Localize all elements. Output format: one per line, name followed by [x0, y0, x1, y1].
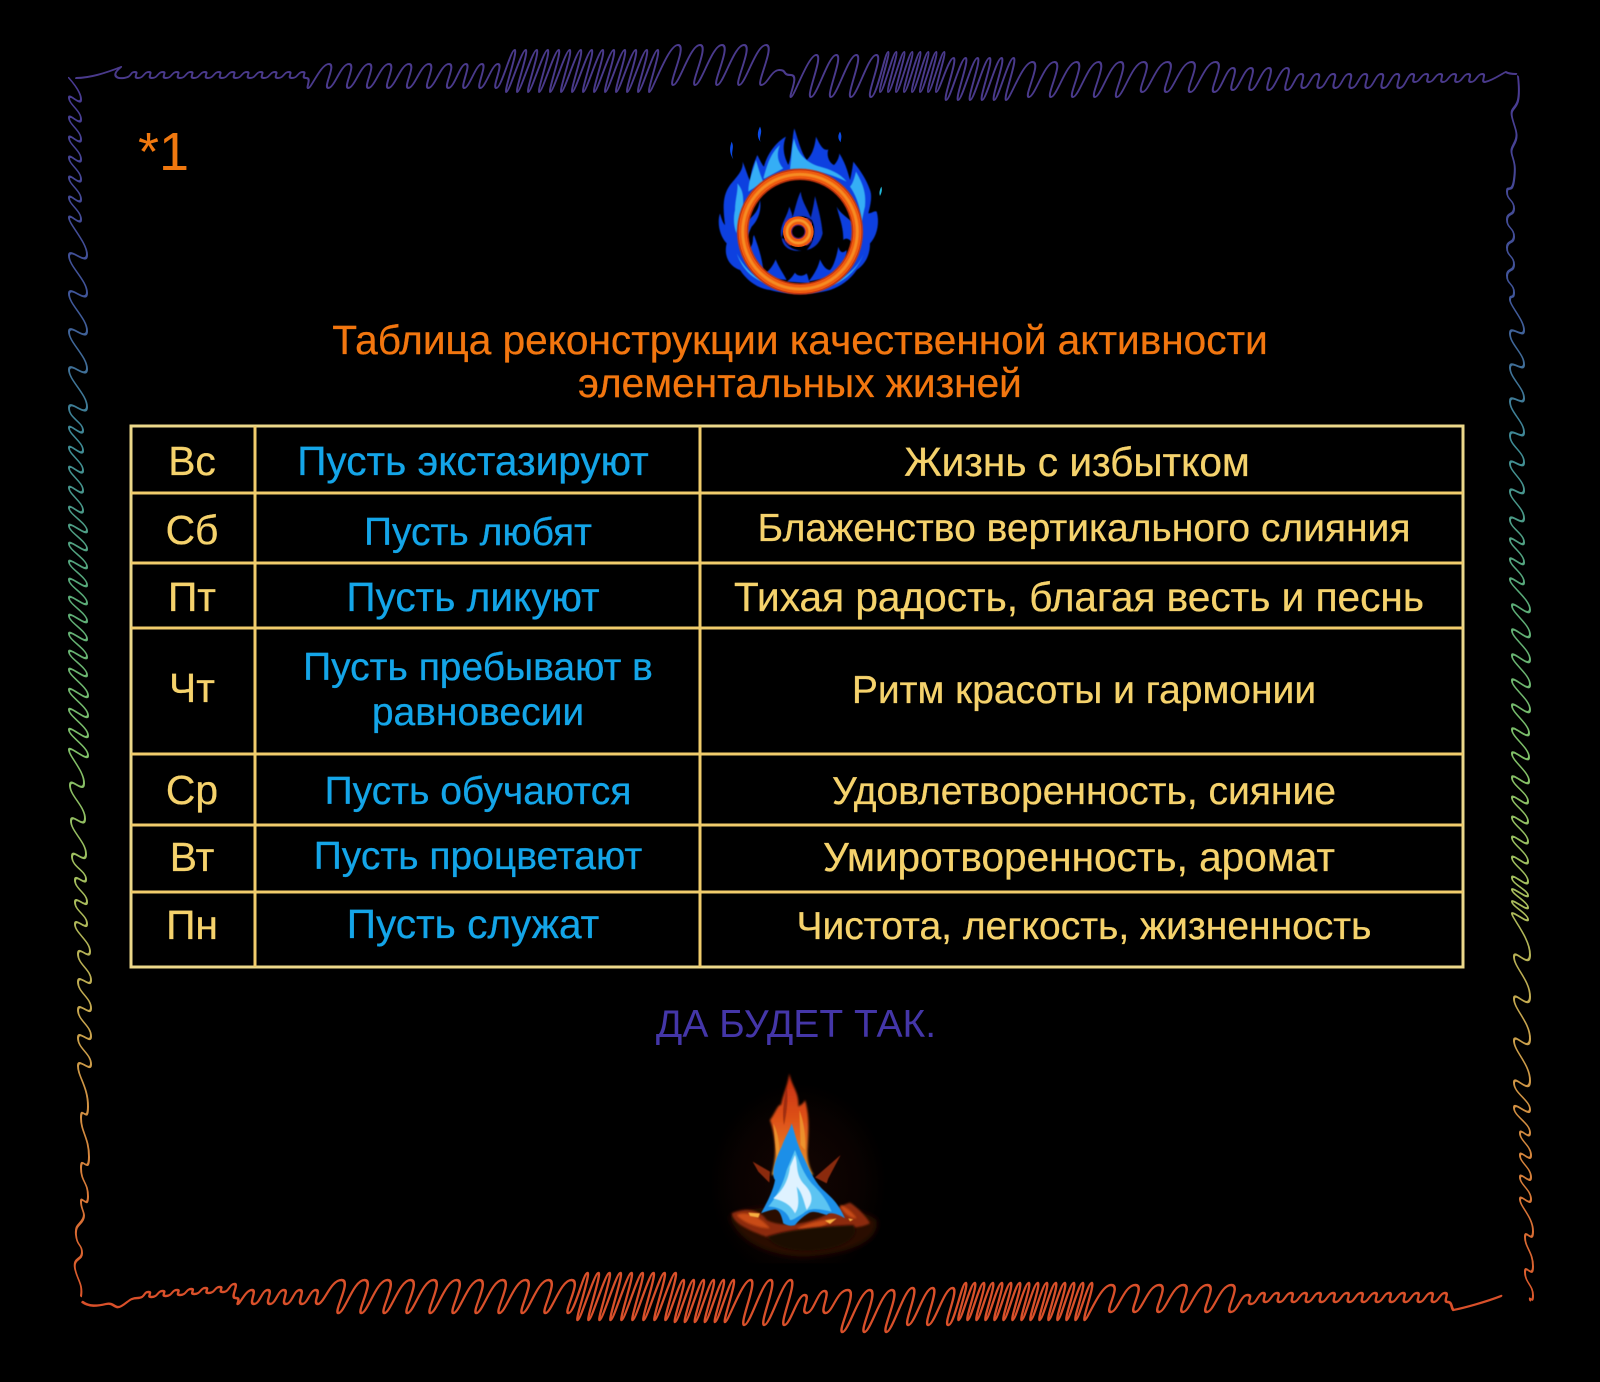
table: blessings column: Пусть процветают — [314, 835, 642, 878]
icon: campfire with blue flame — [710, 1063, 887, 1263]
table: qualities column: Жизнь с избытком — [904, 439, 1250, 485]
inner ring — [787, 220, 810, 243]
table: blessings column: Пусть экстазируют — [297, 438, 649, 484]
table grid — [131, 426, 1463, 967]
decorative frame: right wavy line — [1507, 70, 1533, 1302]
table: blessings column: Пусть ликуют — [346, 574, 600, 620]
outer flames — [719, 128, 878, 294]
table: days column: Вт — [170, 834, 214, 880]
table: blessings column: Пусть пребывают в — [303, 646, 653, 689]
table: qualities column: Чистота, легкость, жизненность — [797, 905, 1371, 948]
title — [332, 317, 1268, 406]
decorative frame: top wavy line — [70, 45, 1524, 100]
light flame streaks — [734, 138, 865, 285]
table: qualities column: Умиротворенность, аромат — [823, 834, 1335, 880]
icon: blue fire ring — [719, 127, 882, 294]
table: days column: Сб — [166, 507, 218, 553]
decorative frame: bottom wavy line — [74, 1273, 1507, 1332]
table: qualities column: Блаженство вертикального слияния — [758, 507, 1410, 550]
table: days column — [166, 438, 218, 948]
table: qualities column — [734, 439, 1424, 948]
table: blessings column: Пусть служат — [347, 901, 599, 947]
page marker: *1 — [138, 122, 189, 182]
table: blessings column: Пусть любят — [364, 511, 592, 554]
embers — [730, 1206, 877, 1257]
sticks — [753, 1162, 770, 1183]
table: blessings column: равновесии — [372, 691, 584, 734]
table: qualities column: Удовлетворенность, сияние — [832, 770, 1336, 813]
table: qualities column: Тихая радость, благая весть и песнь — [734, 574, 1424, 620]
closing line: ДА БУДЕТ ТАК. — [656, 1003, 936, 1046]
decorative frame: left wavy line — [69, 78, 91, 1302]
wisps — [730, 127, 841, 159]
glowing logs — [732, 1203, 870, 1240]
table: days column: Чт — [169, 665, 215, 711]
table: qualities column: Ритм красоты и гармонии — [852, 669, 1316, 712]
flames inside ring — [745, 200, 853, 283]
table: days column: Ср — [166, 767, 218, 813]
table: days column: Вс — [168, 438, 216, 484]
blue flame — [761, 1123, 845, 1226]
outer ring — [743, 174, 857, 289]
inner flame — [781, 192, 823, 251]
table: days column: Пн — [166, 902, 218, 948]
table: blessings column — [297, 438, 653, 947]
title: Таблица реконструкции качественной активности — [332, 317, 1268, 363]
table: days column: Пт — [168, 574, 216, 620]
orange flame — [770, 1073, 813, 1175]
title: элементальных жизней — [578, 360, 1022, 406]
table: blessings column: Пусть обучаются — [325, 770, 631, 813]
